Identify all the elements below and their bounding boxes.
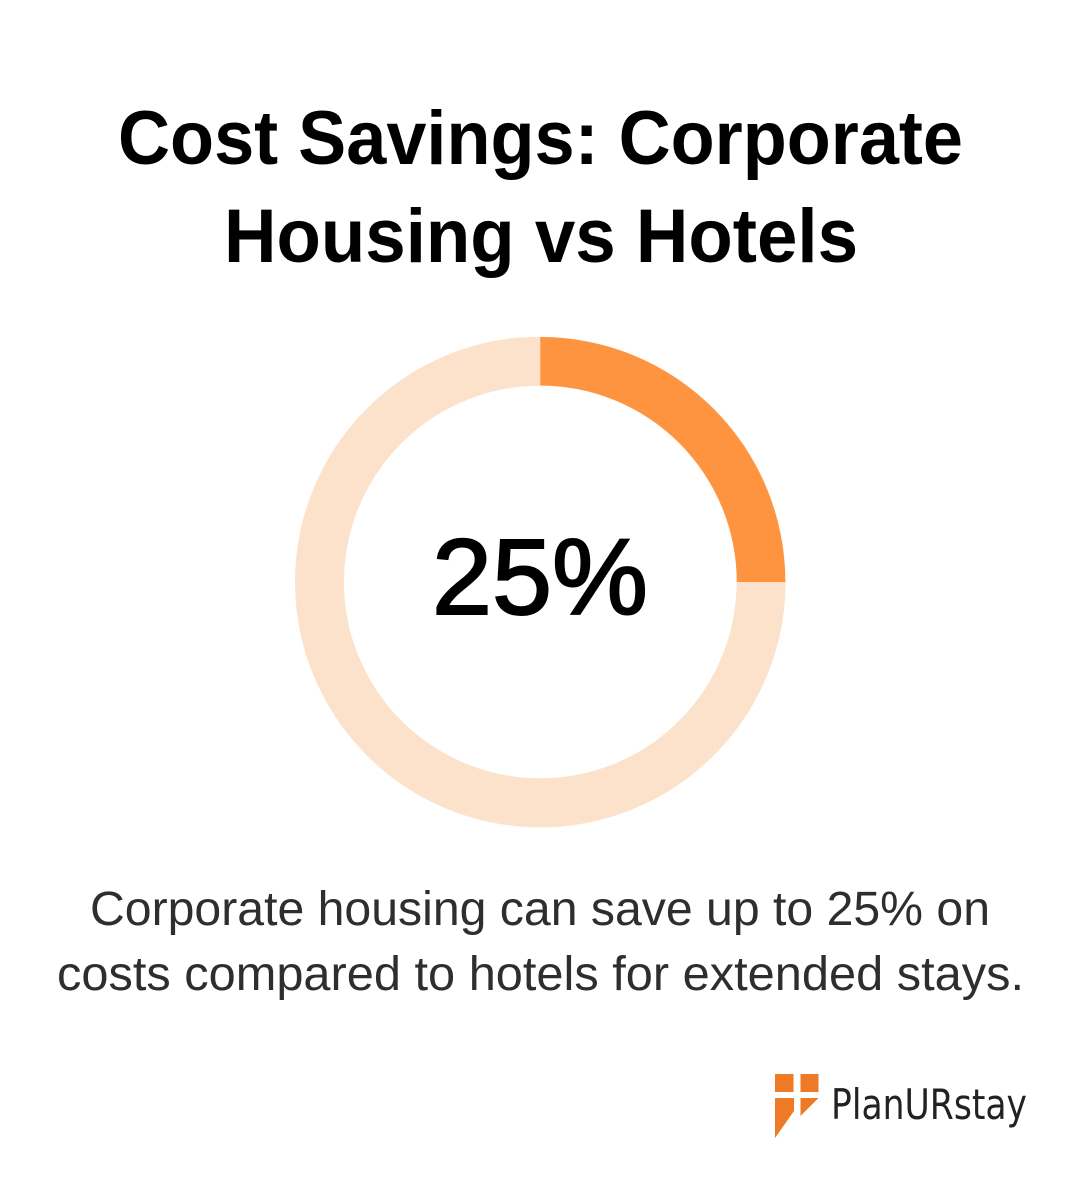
title: Housing vs Hotels (224, 194, 858, 279)
logo wordmark: PlanURstay (831, 1080, 1027, 1129)
logo icon (775, 1074, 818, 1138)
description text: Corporate housing can save up to 25% on (90, 883, 990, 936)
title: Cost Savings: Corporate (118, 96, 963, 181)
center value: 25% (432, 516, 648, 637)
donut track (320, 361, 761, 803)
description text (57, 883, 1024, 1001)
title (118, 96, 963, 279)
logo: PlanURstay (775, 1074, 1027, 1138)
description text: costs compared to hotels for extended stays. (57, 948, 1024, 1001)
donut chart: 25% (320, 337, 785, 803)
donut highlighted segment (540, 337, 785, 582)
